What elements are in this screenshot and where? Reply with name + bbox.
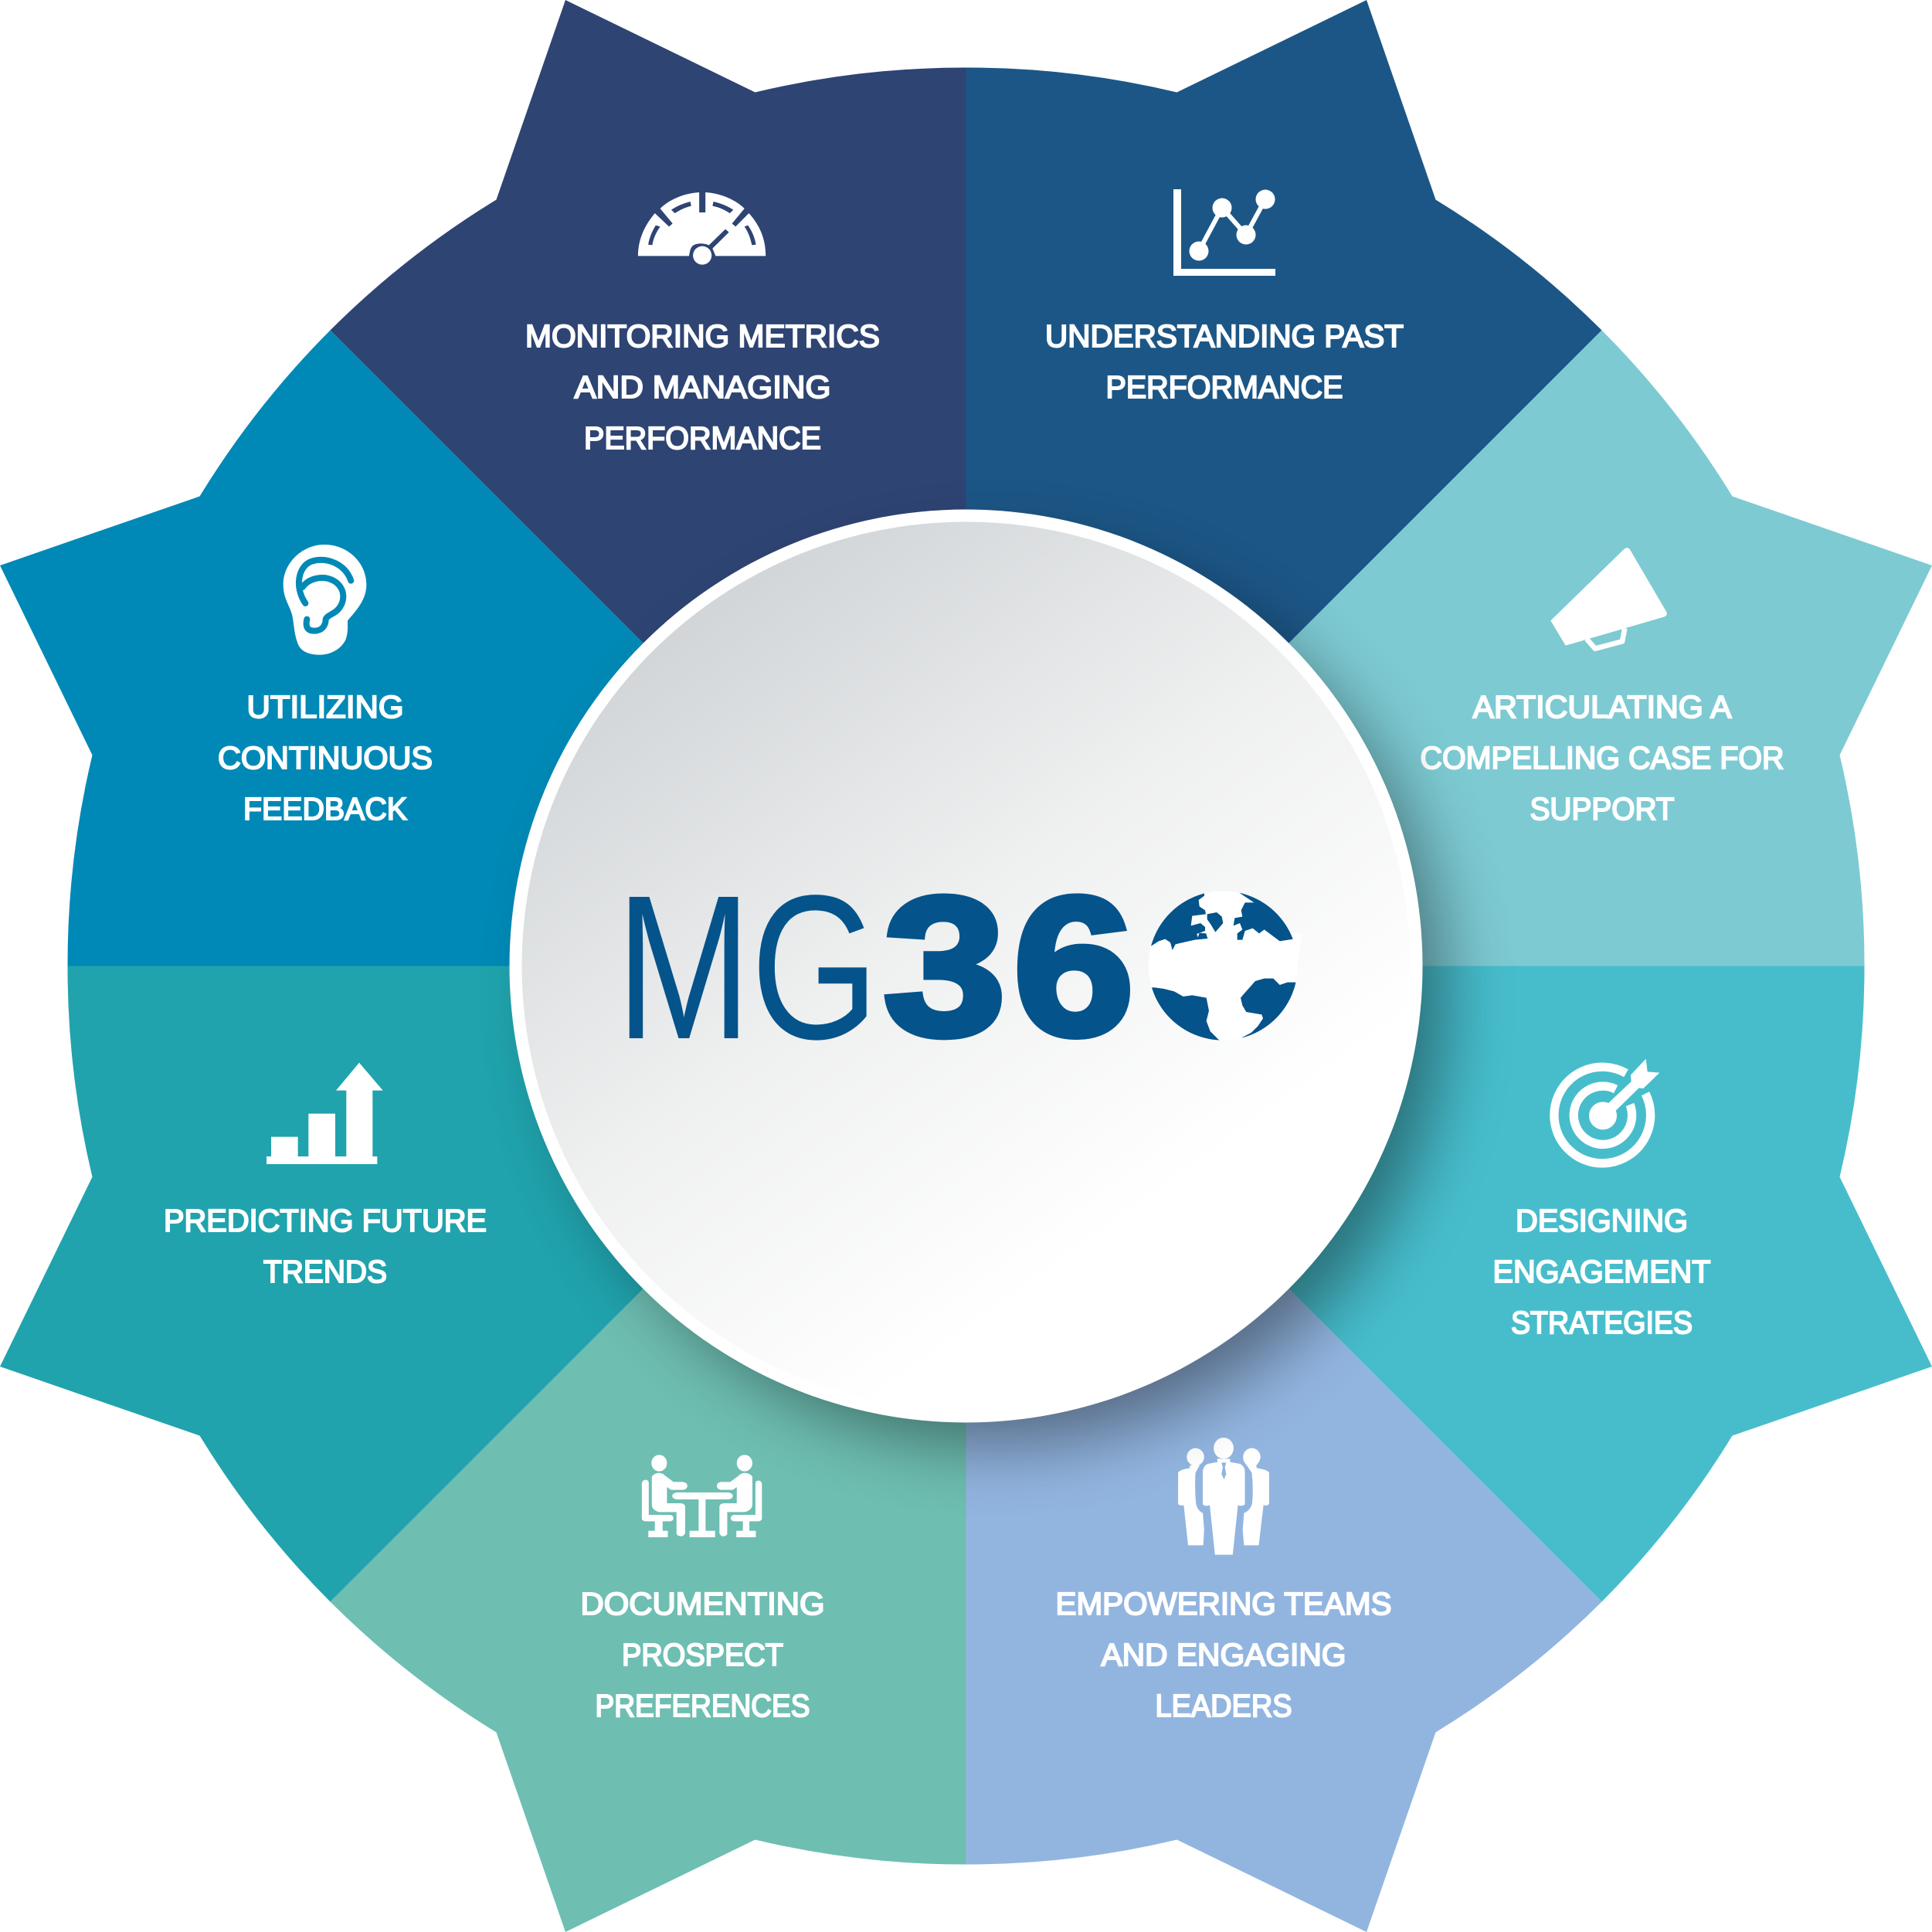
label: designing engagement strategies: [1492, 1203, 1710, 1340]
icon: two people at a table: [642, 1455, 762, 1537]
panel: utilizing continuous feedback: [0, 331, 966, 966]
panel: designing engagement strategies: [966, 966, 1932, 1602]
label: monitoring metrics: AND MANAGING: [575, 369, 831, 405]
label: utilizing continuous feedback: [218, 689, 433, 827]
logo: MG360: [629, 891, 1296, 1041]
label: documenting prospect preferences: PREFERENCES: [595, 1688, 810, 1723]
label: utilizing continuous feedback: UTILIZING: [247, 689, 403, 725]
label: articulating a compelling case: SUPPORT: [1530, 791, 1675, 827]
label: designing engagement strategies: DESIGNING: [1516, 1203, 1688, 1238]
panel: documenting prospect preferences: [331, 966, 966, 1932]
label: predicting future trends: [164, 1203, 487, 1289]
icon: gauge: [638, 192, 766, 265]
icon: team of three people: [1178, 1438, 1269, 1555]
label: monitoring metrics: MONITORING METRICS: [525, 318, 880, 354]
icon: line chart: [1173, 189, 1275, 276]
label: empowering teams: AND ENGAGING: [1102, 1637, 1346, 1672]
panel: articulating a compelling case: [966, 331, 1932, 966]
panel: empowering teams: [966, 966, 1602, 1932]
label: understanding past performance: PERFORMANCE: [1106, 369, 1343, 405]
logo text 36: [883, 856, 1134, 1077]
label: articulating a compelling case: ARTICULATING A: [1472, 689, 1732, 725]
icon: growth bars with arrow: [267, 1063, 383, 1164]
logo text MG: M: [616, 852, 752, 1082]
central white ring: [510, 510, 1423, 1423]
label: designing engagement strategies: STRATEGIES: [1511, 1305, 1693, 1340]
label: predicting future trends: TRENDS: [263, 1254, 387, 1289]
icon: ear: [284, 545, 366, 655]
label: understanding past performance: UNDERSTANDING PAST: [1045, 318, 1404, 354]
logo text 36: 6: [1014, 856, 1134, 1076]
label: designing engagement strategies: ENGAGEMENT: [1492, 1254, 1710, 1289]
label: utilizing continuous feedback: CONTINUOUS: [218, 740, 433, 776]
label: articulating a compelling case: [1420, 689, 1784, 827]
label: utilizing continuous feedback: FEEDBACK: [243, 791, 407, 827]
label: empowering teams: EMPOWERING TEAMS: [1055, 1586, 1392, 1621]
central gradient disc: [522, 522, 1411, 1411]
label: empowering teams: [1055, 1586, 1392, 1723]
label: monitoring metrics: PERFORMANCE: [584, 420, 821, 456]
icon: megaphone: [1550, 548, 1667, 649]
panel: predicting future trends: [0, 966, 966, 1602]
label: empowering teams: LEADERS: [1156, 1688, 1292, 1723]
logo text MG: G: [751, 853, 879, 1082]
label: understanding past performance: [1045, 318, 1404, 405]
label: documenting prospect preferences: [581, 1586, 825, 1723]
label: documenting prospect preferences: DOCUMENTING: [581, 1586, 825, 1621]
logo globe: [1149, 891, 1296, 1040]
logo text 36: 3: [883, 857, 1006, 1077]
label: articulating a compelling case: COMPELLING CASE FOR: [1420, 740, 1784, 776]
logo text MG: [616, 852, 879, 1082]
panel: monitoring metrics: [331, 0, 966, 966]
label: documenting prospect preferences: PROSPECT: [622, 1637, 783, 1672]
icon: target with arrow: [1554, 1059, 1659, 1163]
label: monitoring metrics: [525, 318, 880, 456]
label: predicting future trends: PREDICTING FUTURE: [164, 1203, 487, 1238]
central disc shadow: [552, 552, 1445, 1445]
panel: understanding past performance: [966, 0, 1602, 966]
